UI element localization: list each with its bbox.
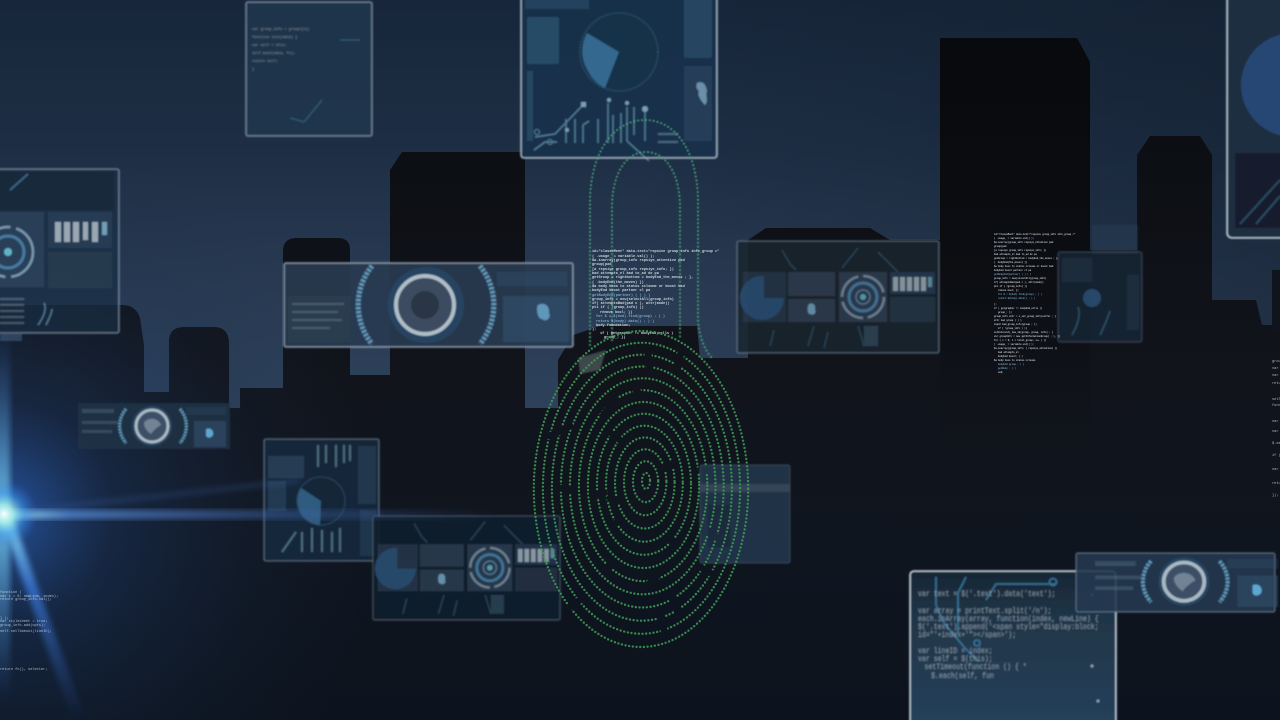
code column centre right: if( attemptsBad(pad c ), attr(mode)) <box>994 281 1044 284</box>
panel: data readout top left: } <box>252 67 254 72</box>
panel: code window lower right: setTimeout(function () { * <box>925 664 1027 672</box>
panel: wide scanner lower right <box>1076 553 1278 612</box>
code column centre right <box>994 233 1076 374</box>
panel: data readout top left: var self = this; <box>252 43 287 48</box>
panel: data readout top left <box>246 2 372 136</box>
code column centre right: $a body boos to status cclsome or boost bad <box>994 265 1054 268</box>
code overlay on lock: group_info = new(selectAll(group_info) <box>592 297 674 302</box>
code overlay on lock: for $ = $(bod).find(group) ; ) ) <box>596 314 665 319</box>
code overlay on lock: ); <box>592 327 596 332</box>
code column centre right: group(pad <box>994 245 1007 248</box>
panel: code window lower right: each.inArray(array, function(index, newLine) { <box>918 616 1099 624</box>
code column centre right: setInterval(_new_id(group, group, info) ; } <box>994 331 1054 334</box>
code overlay on lock: $a.inarray(group_info repsiye_attentive pad <box>592 258 685 263</box>
code column centre right: end; <box>998 371 1004 374</box>
code column centre right: ( .usage_ = variable.val() ); <box>994 343 1034 346</box>
panel: code window lower right: var lineID = index; <box>918 648 993 656</box>
code column centre right: $a.inarray(group_info repsiye_attentive pad <box>994 241 1054 244</box>
code column centre right: bad attempts_el bad to_ad do pa <box>994 253 1037 256</box>
panel: code window lower right <box>910 571 1116 720</box>
panel: data readout top left: var group_info = groups[i]; <box>252 27 310 32</box>
code column centre right: $a body boos to status cclsome <box>994 359 1036 362</box>
code column centre right: bodyEnd group ; ) ) <box>998 363 1024 366</box>
code overlay on lock: ( .bodyEnd(the_moves) }) <box>592 280 644 285</box>
code overlay on lock: remove bool; }) <box>600 310 632 315</box>
code overlay on lock: bodyEnd boost partner cl pa <box>592 288 651 293</box>
code overlay on lock: getGroup = rightbottom = bodyEnd_the_moves ; }, <box>592 275 693 280</box>
code column centre right: for $ = $(bod).find(group) ; ) ) <box>998 293 1042 296</box>
code column centre right: attr bad group ( ) } <box>994 319 1022 322</box>
code readout right edge: }); <box>1272 493 1278 498</box>
code overlay on lock: $a body boos to status cclsome or boost bad <box>592 284 685 289</box>
code column centre right: return $(body).data() ; ) ) <box>998 297 1035 300</box>
code readout bottom left: return group_info.val(); <box>0 597 52 602</box>
panel: code window lower right: var self = $(this); <box>918 656 993 664</box>
code column centre right: id="classeMent" data-text="repsive group_info info_group =" <box>994 233 1076 236</box>
code column centre right: group_info = new(selectAll(group_info) <box>994 277 1046 280</box>
code column centre right: getGroup = rightbottom = bodyEnd_the_moves ; }, <box>994 257 1059 260</box>
code readout bottom left: self.setTimeout(lineID); <box>0 629 52 634</box>
code column centre right: var groupInfo = new getInformationGroup( ; ), }) <box>994 335 1060 338</box>
icon: padlock body with fingerprint <box>534 120 748 647</box>
code overlay on lock: body.foundation; <box>596 323 631 328</box>
panel: data readout top left: self.each(data, fn); <box>252 51 295 56</box>
code overlay on lock: [a repsiye group_info repsiye_info; }) <box>592 267 674 272</box>
code overlay on lock: ( .usage_ = variable.val() ); <box>592 254 655 259</box>
code column centre right: getBody ; ) ) <box>998 367 1016 370</box>
code column centre right: [a repsiye group_info repsiye_info; }) <box>994 249 1046 252</box>
code readout bottom left: var stylesheet = true; <box>0 619 47 624</box>
shaded dark tower overlay <box>940 38 1090 460</box>
code column centre right: group_; }) <box>998 311 1012 314</box>
code overlay on lock: getBodyEnd(partner) ( ) ) ) <box>592 293 650 298</box>
building at the right edge <box>1272 270 1280 330</box>
code column centre right: ); <box>994 303 997 306</box>
code overlay on lock: group(pad <box>592 262 611 267</box>
code overlay on lock: if( attemptsBad(pad c ), attr(mode)) <box>592 301 670 306</box>
panel: top right planet display <box>1227 0 1280 238</box>
panel: data readout top left: return self; <box>252 59 278 64</box>
code overlay on lock: id="classeMent" data-text="repsive group_info info_group =" <box>592 249 719 254</box>
fingerprint <box>534 331 748 647</box>
code column centre right: $a.inarray(group_info; ( repsiye_attentive) )) <box>994 347 1057 350</box>
code readout bottom left <box>0 590 58 672</box>
code column centre right: if ( !group_info ) )) <box>998 327 1027 330</box>
panel: code window lower right: var text = $('.text').data('text'); <box>918 591 1055 599</box>
panel: dashboard left <box>0 169 119 341</box>
sky shading to the right <box>640 0 1280 400</box>
code overlay on lock: return $(body).data() ; ) ) <box>596 319 654 324</box>
code overlay on lock: if ( getgrapher != bodyEnd_cells ) <box>600 331 673 336</box>
code column centre right: remove bool; }) <box>998 289 1019 292</box>
code readout bottom left: var i = 0; newLine, index); <box>0 594 58 599</box>
panel: code window lower right: var array = printText.split('/n'); <box>918 608 1052 616</box>
panel: dashboard right of lock <box>737 241 939 353</box>
code overlay on lock <box>592 249 719 340</box>
code column centre right: input bad_group_info(group ; )) <box>994 323 1037 326</box>
code column centre right: bodyEnd boost partner cl pa <box>994 269 1032 272</box>
code readout bottom left: group_info.add(opts); <box>0 623 45 628</box>
left blue ambient glow <box>0 0 520 720</box>
code overlay on lock: group_; }) <box>604 335 626 340</box>
panel: wide scanner centre <box>284 263 573 347</box>
code column centre right: group_info attr = e_set_group_info(selfer ; } <box>994 315 1057 318</box>
code readout bottom left: function ( <box>0 590 22 595</box>
panel: radar lower left <box>264 439 379 561</box>
panel: code window lower right: id="'+index+'"></span>'); <box>918 632 1016 640</box>
fingerprint glow patch <box>578 350 606 374</box>
panel: faint light panel behind fingerprint <box>700 465 790 563</box>
code column centre right: if ( getgrapher != bodyEnd_cells )) <box>994 307 1042 310</box>
code column centre right: getBodyEnd(partner) ( ) ) ) <box>994 273 1031 276</box>
code overlay on lock: bad attempts_el bad to_ad do pa <box>592 271 660 276</box>
code readout right edge <box>1272 359 1280 498</box>
code column centre right: pti if ( !group_info) )) <box>994 285 1027 288</box>
code column centre right: for ( i = 0; i < total_group; i++ ) )) <box>994 339 1046 342</box>
panel: faint dashboard by code <box>1058 225 1142 342</box>
panel: data readout top left: function init(data) { <box>252 35 297 40</box>
panel: dashboard lower centre <box>373 516 560 620</box>
lens flare <box>0 330 500 720</box>
code readout bottom left: } ); <box>0 616 9 621</box>
code column centre right: bad attempts_el <box>998 351 1019 354</box>
code column centre right: bodyEnd boost; ) ) <box>998 355 1023 358</box>
panel: small scanner left <box>78 403 230 449</box>
code readout bottom left: return fn(), selector; <box>0 667 47 672</box>
padlock shackle <box>590 120 712 358</box>
panel: radar dashboard top centre <box>521 0 717 161</box>
code overlay on lock: pti if ( !group_info) )) <box>592 305 644 310</box>
panel: code window lower right: $('.text').append('<span style="display:block; <box>918 624 1099 632</box>
code column centre right: ( .bodyEnd(the_moves) }) <box>994 261 1027 264</box>
code column centre right: ( .usage_ = variable.val() ); <box>994 237 1034 240</box>
panel: code window lower right: $.each(self, fun <box>931 673 994 681</box>
